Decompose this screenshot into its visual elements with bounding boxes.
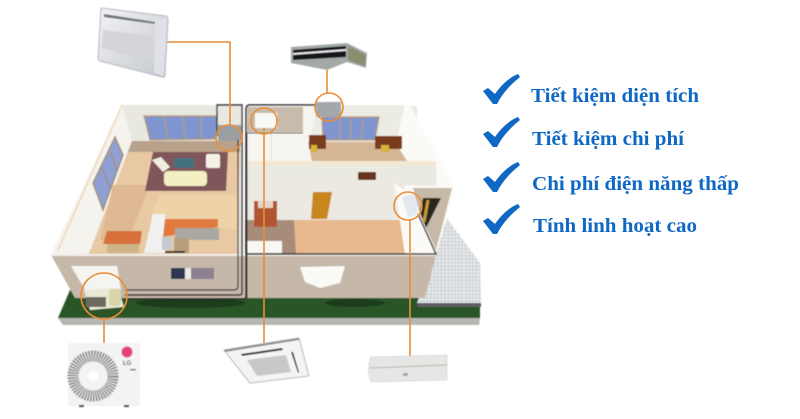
icon: ceiling cassette unit bbox=[224, 338, 309, 383]
desks bbox=[309, 135, 402, 152]
benefit: low electricity cost: Chi phí điện năng thấp bbox=[532, 174, 739, 195]
benefit: saves space: Tiết kiệm diện tích bbox=[531, 86, 699, 107]
icon: outdoor unit: LG bbox=[123, 361, 131, 367]
rug and sofa bbox=[145, 152, 228, 191]
outdoor unit in house bbox=[84, 288, 124, 310]
orange callout lines and circles bbox=[81, 42, 422, 357]
front wall bay window bbox=[300, 266, 345, 288]
benefit: low electricity cost bbox=[483, 162, 739, 195]
balcony bbox=[413, 188, 452, 250]
icon: ducted indoor unit bbox=[291, 43, 367, 70]
front wall bbox=[51, 254, 436, 298]
air handling duct panel bbox=[218, 125, 241, 141]
wall unit in house bbox=[402, 194, 418, 218]
duct unit in house bbox=[316, 102, 341, 117]
front wall window bbox=[71, 266, 121, 290]
refrigerant pipes bbox=[125, 105, 436, 299]
kitchen and dining bbox=[103, 214, 219, 253]
right rooms bbox=[245, 105, 455, 256]
ground base bbox=[58, 290, 480, 325]
benefit: saves space bbox=[483, 74, 699, 107]
door bbox=[311, 192, 332, 219]
front wall kitchen counter bbox=[171, 268, 214, 279]
benefit list bbox=[483, 74, 739, 237]
lower room wall bbox=[247, 182, 405, 220]
grated terrace bbox=[417, 213, 481, 307]
icon: outdoor unit bbox=[68, 343, 140, 407]
windows bbox=[93, 116, 217, 210]
benefit: high flexibility: Tính linh hoạt cao bbox=[533, 216, 697, 237]
benefit: saves cost: Tiết kiệm chi phí bbox=[532, 129, 685, 150]
upper room window bbox=[322, 117, 379, 140]
house floor plan bbox=[51, 102, 481, 325]
icon: wall-mounted unit bbox=[368, 355, 447, 382]
icon: floor-standing indoor unit bbox=[98, 8, 168, 77]
benefit: high flexibility bbox=[483, 204, 697, 237]
partition wall bbox=[247, 161, 437, 186]
left room bbox=[51, 105, 243, 255]
benefit: saves cost bbox=[483, 117, 685, 150]
side corridor bbox=[394, 182, 436, 254]
upper room floor bbox=[308, 142, 407, 161]
lower room floor bbox=[245, 201, 405, 254]
